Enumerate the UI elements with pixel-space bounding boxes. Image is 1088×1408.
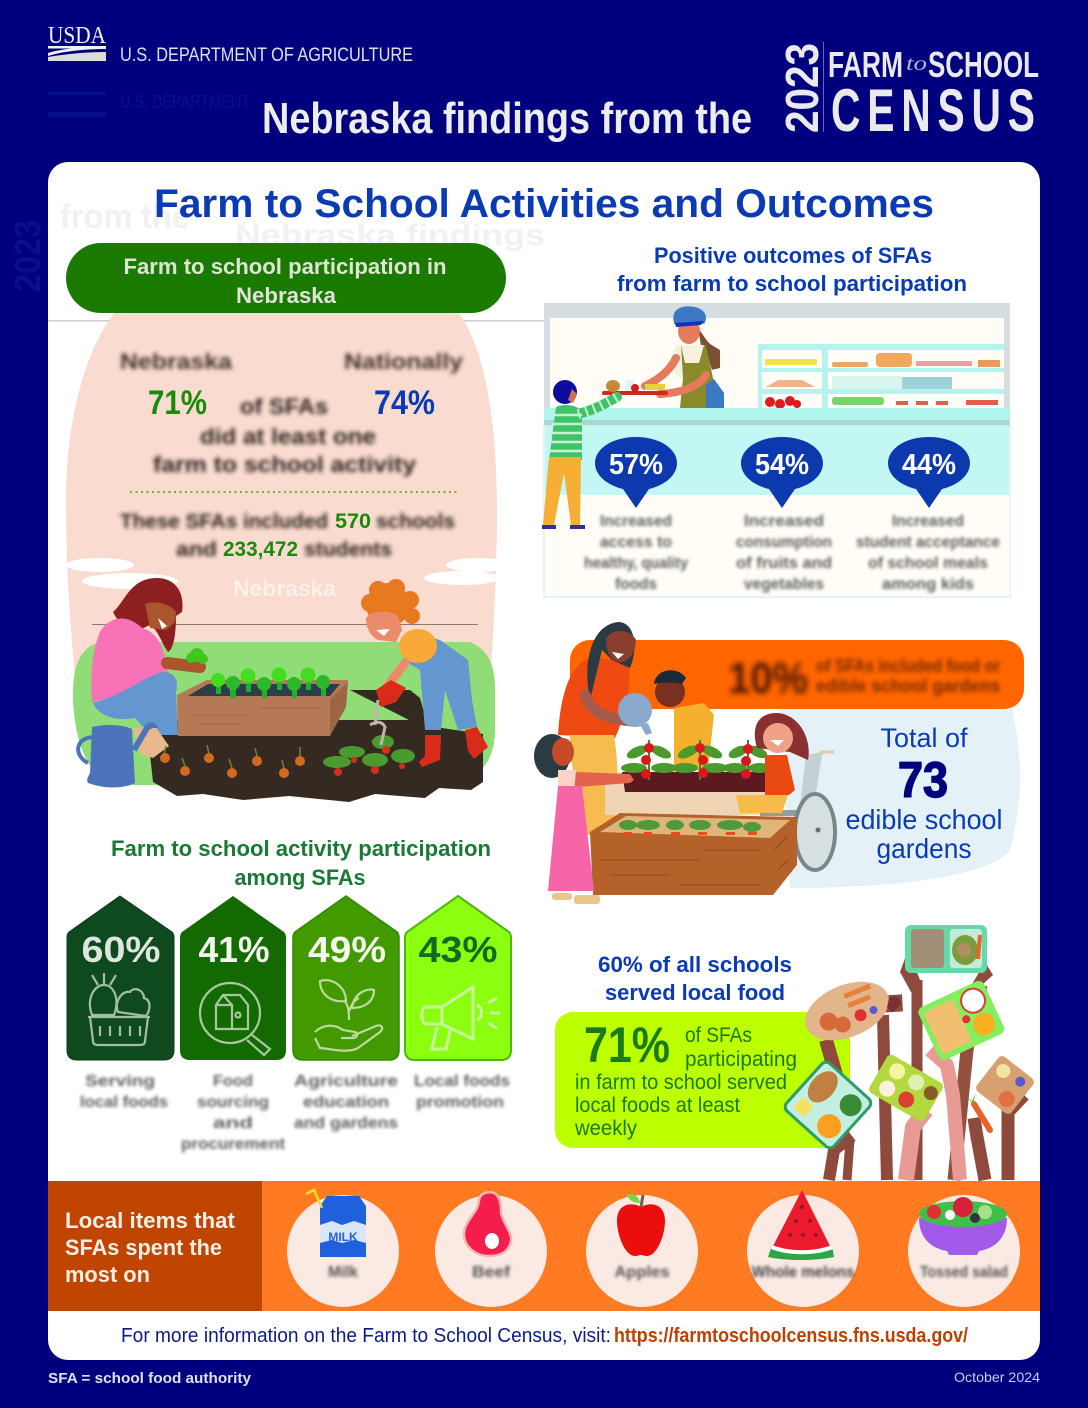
- item: beef: Beef: [472, 1264, 511, 1281]
- tomato plants: [621, 740, 772, 780]
- item: apples: [586, 1194, 698, 1307]
- outcome 54%: [736, 437, 832, 593]
- panel: edible school gardens: [534, 622, 1024, 904]
- outcome 44%: student acceptance: [856, 534, 1000, 551]
- Nebraska and nationally labels: Nebraska: [120, 349, 233, 374]
- outcome 57%: [584, 437, 688, 593]
- panel: farm to school participation: [66, 243, 510, 802]
- local food callout: of SFAs: [685, 1024, 752, 1047]
- activity: local foods 60%: Serving: [85, 1073, 155, 1090]
- schools and students reach: schools: [376, 511, 455, 533]
- watering can: [618, 693, 652, 735]
- activity: local foods 60%: 60%: [82, 929, 160, 970]
- Nebraska and nationally labels: Nationally: [344, 349, 464, 374]
- local food heading: served local food: [605, 980, 785, 1005]
- outcome panel background: [544, 426, 1010, 597]
- outcome 54%: vegetables: [744, 576, 824, 593]
- total of 73 gardens: gardens: [876, 833, 972, 864]
- text: U.S. DEPARTMENT: [120, 92, 250, 112]
- activity: agriculture education 49%: and gardens: [294, 1115, 398, 1132]
- participation description: farm to school activity: [153, 452, 417, 477]
- activity: agriculture education 49%: Agriculture: [294, 1073, 398, 1090]
- panel: farm to school activities: [67, 896, 511, 1153]
- outcome 44%: among kids: [882, 576, 974, 593]
- activity: agriculture education 49%: education: [303, 1094, 389, 1111]
- activity: food sourcing 41%: [180, 896, 286, 1153]
- band heading: Local items that: [65, 1208, 236, 1233]
- local food callout: participating: [685, 1048, 797, 1071]
- outcome 44%: Increased: [892, 513, 964, 530]
- outcomes heading: [617, 243, 967, 296]
- outcome 44%: [856, 437, 1000, 593]
- outcome 57%: foods: [615, 576, 657, 593]
- total of 73 gardens: [846, 723, 1002, 864]
- local food callout: 71%: [584, 1017, 670, 1073]
- boy in yellow: [654, 670, 714, 770]
- participation heading pill: [66, 243, 506, 313]
- activity heading: Farm to school activity participation: [111, 836, 491, 861]
- orange banner: of SFAs included food or: [816, 656, 1000, 676]
- activity: food sourcing 41%: procurement: [181, 1136, 286, 1153]
- census logo: to: [906, 53, 927, 75]
- carrots and beets: [160, 735, 415, 778]
- activity: food sourcing 41%: and: [213, 1115, 253, 1132]
- band heading: most on: [65, 1262, 150, 1287]
- orange banner: 10%: [728, 654, 808, 703]
- child at counter: [542, 380, 617, 529]
- lower left tray: [783, 1060, 873, 1150]
- activity: food sourcing 41%: Food: [213, 1073, 253, 1090]
- outcome 44%: 44%: [902, 449, 956, 481]
- main white card: [48, 162, 1040, 1360]
- census logo: [776, 42, 1039, 144]
- outcomes heading: Positive outcomes of SFAs: [654, 243, 932, 268]
- participation description: of SFAs: [240, 394, 328, 419]
- lime tray: [867, 1053, 945, 1123]
- panel: positive outcomes: [542, 303, 1010, 597]
- local food heading: 60% of all schools: [598, 952, 792, 977]
- department name: U.S. DEPARTMENT OF AGRICULTURE: [120, 45, 413, 66]
- text: 2023: [7, 220, 48, 292]
- orange banner: [570, 640, 1024, 709]
- item: melons: Whole melons: [752, 1264, 855, 1281]
- activity heading: among SFAs: [234, 865, 366, 890]
- item: salad: Tossed salad: [920, 1264, 1008, 1281]
- outcome 54%: of fruits and: [736, 555, 832, 572]
- item: milk: Milk: [328, 1264, 358, 1281]
- participation blob: [66, 312, 497, 690]
- text: Nebraska findings: [235, 219, 545, 252]
- schools and students reach: 233,472: [223, 538, 298, 561]
- USDA logo: [48, 23, 107, 61]
- boy: [361, 579, 488, 767]
- USDA logo: USDA: [48, 23, 107, 49]
- local food callout: weekly: [574, 1117, 637, 1140]
- display cases: [758, 344, 1004, 409]
- outcome 54%: 54%: [755, 449, 809, 481]
- green tray: [916, 979, 1006, 1062]
- local food heading: [598, 952, 792, 1005]
- arms: [826, 980, 1024, 1180]
- carrot: [966, 1093, 990, 1130]
- local food callout: in farm to school served: [575, 1071, 787, 1094]
- top tray: [905, 925, 987, 973]
- panel: farm to school participation: Nebraska: [233, 576, 337, 601]
- cafeteria illustration: [544, 303, 1010, 426]
- participation description: [153, 394, 417, 477]
- schools and students reach: These SFAs included: [120, 511, 328, 533]
- local food callout: [555, 1012, 850, 1148]
- back planter: [605, 772, 770, 815]
- cafeteria worker: [645, 306, 724, 408]
- main heading: Farm to School Activities and Outcomes: [154, 182, 934, 226]
- census logo: 2023: [776, 43, 828, 133]
- item: melons: [747, 1190, 859, 1307]
- girl in wheelchair: [736, 713, 835, 870]
- total of 73 gardens: edible school: [846, 804, 1002, 835]
- item: milk: [287, 1190, 399, 1307]
- item: milk: MILK: [328, 1230, 358, 1244]
- orange banner: edible school gardens: [816, 676, 1000, 696]
- activity heading: [111, 836, 491, 890]
- band heading: [48, 1181, 262, 1311]
- little girl: [534, 734, 634, 904]
- outcome 54%: Increased: [744, 513, 824, 530]
- right tray: [974, 1054, 1036, 1116]
- census logo: CENSUS: [831, 77, 1035, 144]
- oval tray: [796, 970, 898, 1052]
- item: apples: Apples: [614, 1264, 670, 1281]
- participation heading pill: Farm to school participation in: [124, 254, 446, 279]
- activity: promotion 43%: promotion: [416, 1094, 504, 1111]
- planter box with lettuce: [177, 668, 348, 736]
- illustration: children and teacher gardening: [534, 622, 835, 904]
- activity: promotion 43%: 43%: [418, 929, 498, 970]
- garden backdrop: [780, 709, 1020, 888]
- teacher: [558, 622, 636, 835]
- activity: local foods 60%: [67, 896, 174, 1111]
- illustration: two people gardening: [73, 578, 495, 802]
- more information line: https://farmtoschoolcensus.fns.usda.gov/: [614, 1325, 968, 1347]
- activity: agriculture education 49%: 49%: [308, 929, 386, 970]
- schools and students reach: students: [304, 539, 392, 561]
- outcome 44%: of school meals: [868, 555, 988, 572]
- participation description: did at least one: [200, 424, 376, 449]
- outcome 54%: consumption: [736, 534, 832, 551]
- item: beef: [435, 1192, 547, 1307]
- front planter with carrots: [590, 813, 797, 895]
- band heading: SFAs spent the: [65, 1235, 222, 1260]
- activity: promotion 43%: [405, 896, 511, 1111]
- illustration: raised hands with lunch trays: [783, 925, 1036, 1180]
- activity: agriculture education 49%: [293, 896, 399, 1132]
- outcome 57%: healthy, quality: [584, 555, 688, 572]
- schools and students reach: [120, 510, 455, 561]
- activity: food sourcing 41%: sourcing: [197, 1094, 269, 1111]
- tray with food: [602, 380, 668, 395]
- census logo: FARM: [828, 44, 903, 85]
- census logo: SCHOOL: [928, 44, 1039, 85]
- activity: local foods 60%: local foods: [80, 1094, 168, 1111]
- more information line: For more information on the Farm to School Census, visit:: [121, 1325, 611, 1347]
- outcome 57%: Increased: [600, 513, 672, 530]
- schools and students reach: 570: [335, 510, 371, 533]
- date: October 2024: [954, 1369, 1040, 1385]
- local food callout: local foods at least: [575, 1094, 740, 1117]
- participation heading pill: Nebraska: [236, 283, 337, 308]
- stat: national 74%: 74%: [374, 384, 435, 422]
- stat: Nebraska 71%: 71%: [148, 384, 207, 422]
- activity: promotion 43%: Local foods: [414, 1073, 510, 1090]
- outcomes heading: from farm to school participation: [617, 271, 967, 296]
- total of 73 gardens: Total of: [880, 723, 968, 753]
- footnote: SFA = school food authority: [48, 1370, 252, 1387]
- outcome 57%: 57%: [609, 449, 663, 481]
- activity: food sourcing 41%: 41%: [198, 929, 270, 970]
- total of 73 gardens: 73: [898, 752, 948, 808]
- Nebraska and nationally labels: [120, 349, 464, 374]
- text: from the: [60, 198, 190, 236]
- outcome 57%: access to: [600, 534, 672, 551]
- more information line: [121, 1325, 968, 1347]
- watering can: [78, 725, 155, 788]
- item: salad: [908, 1195, 1020, 1307]
- schools and students reach: and: [176, 539, 217, 561]
- panel: local items band: [48, 1181, 1040, 1311]
- woman: [91, 578, 208, 758]
- header title: Nebraska findings from the: [262, 94, 752, 143]
